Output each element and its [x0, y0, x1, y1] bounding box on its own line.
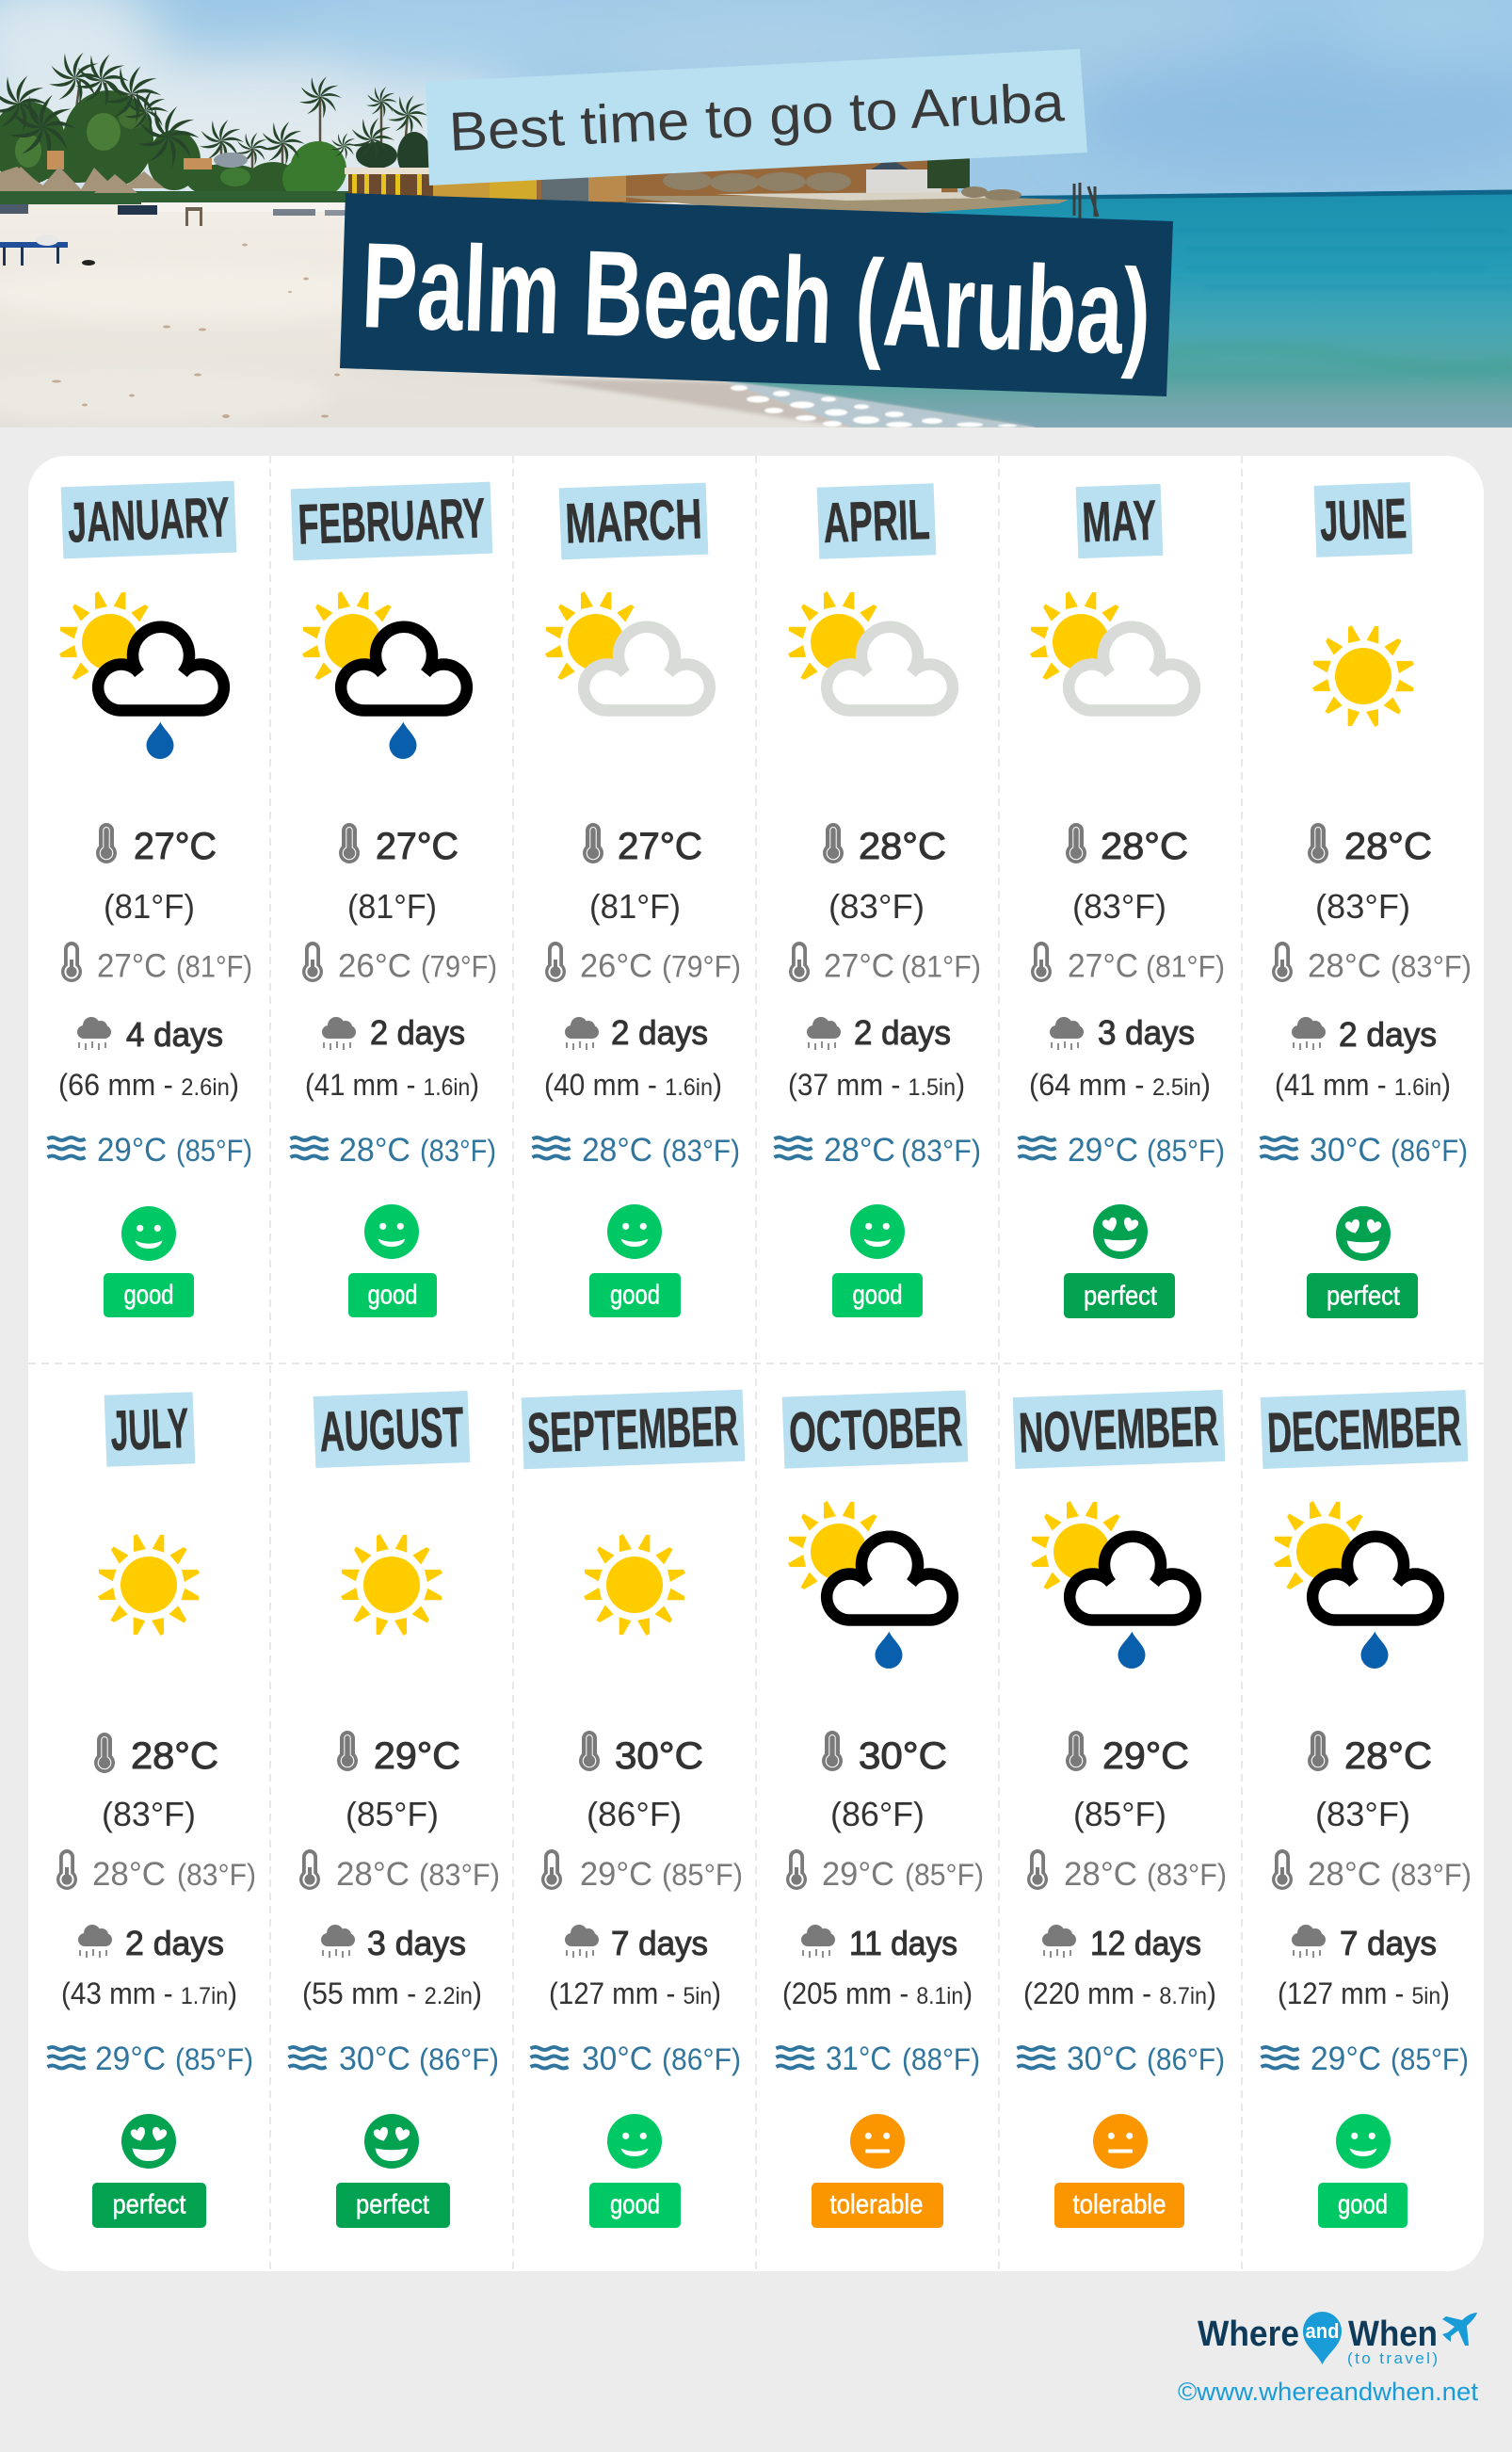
- average temperature: [1066, 1731, 1189, 1833]
- sea temperature: (86°F): [1147, 2042, 1225, 2076]
- low temperature: 27°C: [824, 947, 894, 985]
- low temperature: 29°C: [822, 1856, 894, 1893]
- low temperature: (85°F): [662, 1858, 743, 1892]
- low temperature: (85°F): [905, 1858, 984, 1892]
- rating: tolerable: [812, 2114, 943, 2228]
- sea temperature: (83°F): [901, 1134, 981, 1168]
- rating: good: [589, 1204, 681, 1317]
- low temperature: (83°F): [1391, 1858, 1472, 1892]
- sea temperature: 30°C: [582, 2041, 652, 2077]
- average temperature: [339, 823, 458, 926]
- low temperature: 28°C: [1308, 1856, 1381, 1893]
- rainfall: 3 days: [1098, 1013, 1195, 1052]
- icon: sun, dark cloud and rain drop: [302, 591, 467, 759]
- website credit: ©www.whereandwhen.net: [1178, 2378, 1479, 2406]
- month label: APRIL: [822, 488, 931, 555]
- month label: [291, 482, 492, 560]
- low temperature: [1272, 942, 1472, 985]
- sea temperature: 28°C: [339, 1132, 410, 1169]
- rainfall: [58, 1015, 239, 1102]
- average temperature: (83°F): [1072, 887, 1166, 926]
- average temperature: 28°C: [131, 1735, 218, 1777]
- month label: FEBRUARY: [297, 486, 487, 557]
- average temperature: [579, 1731, 703, 1833]
- sea temperature: 31°C: [826, 2041, 892, 2077]
- average temperature: (83°F): [1315, 887, 1410, 926]
- logo: Where and When (to travel): [1198, 2312, 1477, 2367]
- sea temperature: [1019, 1132, 1225, 1169]
- low temperature: [545, 942, 741, 985]
- average temperature: [823, 823, 946, 926]
- rainfall: (66 mm - 2.6in): [58, 1068, 239, 1102]
- rainfall: (41 mm - 1.6in): [1275, 1068, 1451, 1102]
- sea temperature: [288, 2041, 499, 2077]
- month label: JUNE: [1319, 487, 1407, 553]
- average temperature: (83°F): [828, 887, 925, 926]
- low temperature: (81°F): [176, 949, 252, 983]
- rating: good: [589, 2114, 681, 2228]
- low temperature: 26°C: [338, 947, 411, 985]
- sea temperature: (86°F): [419, 2042, 499, 2076]
- rainfall: 7 days: [1340, 1924, 1437, 1962]
- month label: [817, 483, 936, 559]
- icon: sun, dark cloud and rain drop: [1031, 1501, 1196, 1669]
- sea temperature: (86°F): [1391, 1134, 1468, 1168]
- low temperature: 28°C: [92, 1856, 166, 1893]
- rainfall: 2 days: [854, 1013, 951, 1052]
- average temperature: (83°F): [1315, 1795, 1410, 1833]
- rainfall: 7 days: [611, 1924, 708, 1962]
- panel: July: [47, 1392, 256, 2228]
- rainfall: [549, 1924, 721, 2010]
- low temperature: 28°C: [336, 1856, 410, 1893]
- month label: [1314, 482, 1412, 557]
- rating: good: good: [1338, 2190, 1388, 2220]
- rainfall: 4 days: [126, 1015, 223, 1054]
- low temperature: [789, 942, 981, 985]
- low temperature: [541, 1849, 743, 1893]
- average temperature: 28°C: [1344, 826, 1432, 867]
- sea temperature: 29°C: [95, 2041, 166, 2077]
- rainfall: 2 days: [611, 1013, 708, 1052]
- average temperature: 27°C: [618, 826, 702, 867]
- rating: perfect: perfect: [1327, 1281, 1400, 1311]
- icon: sun: [1312, 625, 1414, 727]
- rating: good: [1318, 2114, 1407, 2228]
- sea temperature: [290, 1132, 496, 1169]
- title banner: Palm Beach (Aruba): [340, 193, 1173, 396]
- icon: sun: [98, 1534, 200, 1636]
- rainfall: 2 days: [1339, 1015, 1437, 1054]
- month label: JANUARY: [67, 485, 231, 555]
- rainfall: [1278, 1924, 1450, 2010]
- icon: sun: [341, 1534, 442, 1636]
- logo: Where and When (to travel): (to travel): [1347, 2349, 1438, 2367]
- low temperature: [786, 1849, 984, 1893]
- rating: perfect: [1064, 1204, 1175, 1318]
- logo: Where and When (to travel): When: [1348, 2315, 1438, 2354]
- low temperature: (79°F): [662, 949, 741, 983]
- panel: October: [776, 1390, 984, 2228]
- average temperature: 29°C: [374, 1735, 460, 1777]
- average temperature: (83°F): [102, 1795, 196, 1833]
- sea temperature: [776, 2041, 980, 2077]
- rainfall: (37 mm - 1.5in): [788, 1068, 965, 1102]
- average temperature: [1308, 1731, 1432, 1833]
- sea temperature: 30°C: [1067, 2041, 1137, 2077]
- month label: [522, 1390, 745, 1469]
- rainfall: 11 days: [849, 1924, 957, 1962]
- rating: tolerable: tolerable: [1073, 2190, 1166, 2220]
- rating: good: [832, 1204, 923, 1317]
- low temperature: [56, 1849, 256, 1893]
- rating: good: good: [124, 1281, 173, 1311]
- month label: NOVEMBER: [1018, 1395, 1219, 1464]
- month label: [61, 481, 236, 558]
- sea temperature: [1262, 2041, 1469, 2077]
- rainfall: 2 days: [370, 1013, 465, 1052]
- sea temperature: [533, 1132, 740, 1169]
- average temperature: [1066, 823, 1188, 926]
- sea temperature: 28°C: [824, 1132, 895, 1169]
- rainfall: [61, 1924, 237, 2010]
- rating: perfect: [336, 2114, 450, 2228]
- icon: sun and grey cloud: [545, 591, 710, 711]
- month label: JULY: [109, 1396, 190, 1462]
- panel: March: [533, 483, 741, 1317]
- month label: [105, 1392, 195, 1467]
- icon: sun: [584, 1534, 685, 1636]
- low temperature: (81°F): [901, 949, 981, 983]
- rainfall: [1275, 1015, 1451, 1102]
- average temperature: (86°F): [587, 1795, 682, 1833]
- low temperature: 28°C: [1064, 1856, 1137, 1893]
- sea temperature: (83°F): [420, 1134, 496, 1168]
- subtitle banner: Best time to go to Aruba: Best time to go to Aruba: [447, 72, 1067, 163]
- rainfall: (41 mm - 1.6in): [305, 1068, 479, 1102]
- average temperature: [337, 1731, 460, 1833]
- low temperature: (83°F): [1147, 1858, 1227, 1892]
- low temperature: [299, 1849, 500, 1893]
- low temperature: (79°F): [421, 949, 497, 983]
- sea temperature: 30°C: [1310, 1132, 1381, 1169]
- rainfall: (55 mm - 2.2in): [302, 1976, 482, 2010]
- sea temperature: (86°F): [662, 2042, 741, 2076]
- average temperature: [583, 823, 702, 926]
- rating: perfect: perfect: [356, 2190, 429, 2220]
- average temperature: 28°C: [1344, 1735, 1432, 1777]
- rating: good: good: [853, 1281, 902, 1311]
- sea temperature: [531, 2041, 741, 2077]
- month label: [559, 483, 708, 559]
- rainfall: [544, 1013, 722, 1102]
- rainfall: (205 mm - 8.1in): [782, 1976, 973, 2010]
- average temperature: 30°C: [615, 1735, 703, 1777]
- average temperature: (85°F): [1073, 1795, 1166, 1833]
- rating: perfect: [92, 2114, 206, 2228]
- rainfall: [305, 1013, 479, 1102]
- month label: [1076, 484, 1163, 558]
- rainfall: [1029, 1013, 1211, 1102]
- low temperature: 26°C: [580, 947, 652, 985]
- rainfall: (127 mm - 5in): [549, 1976, 721, 2010]
- subtitle banner: Best time to go to Aruba: [426, 49, 1087, 186]
- average temperature: 28°C: [1101, 826, 1188, 867]
- rating: perfect: perfect: [1084, 1281, 1157, 1311]
- rainfall: (40 mm - 1.6in): [544, 1068, 722, 1102]
- icon: sun, dark cloud and rain drop: [1274, 1501, 1439, 1669]
- low temperature: [1031, 942, 1225, 985]
- sea temperature: 29°C: [97, 1132, 167, 1169]
- rating: good: [104, 1206, 194, 1317]
- sea temperature: [47, 1132, 252, 1169]
- month label: [314, 1391, 470, 1468]
- sea temperature: [1017, 2041, 1225, 2077]
- month label: MARCH: [564, 487, 703, 556]
- month label: [1013, 1390, 1225, 1469]
- average temperature: (86°F): [830, 1795, 925, 1833]
- rating: perfect: perfect: [113, 2190, 186, 2220]
- average temperature: (81°F): [104, 887, 195, 926]
- rainfall: [782, 1924, 973, 2010]
- rating: good: good: [610, 1281, 660, 1311]
- month label: [782, 1390, 968, 1469]
- month label: AUGUST: [318, 1395, 465, 1463]
- low temperature: (83°F): [419, 1858, 500, 1892]
- sea temperature: (85°F): [1147, 1134, 1225, 1168]
- panel: December: [1261, 1390, 1472, 2228]
- average temperature: 27°C: [134, 826, 217, 867]
- sea temperature: (85°F): [1391, 2042, 1469, 2076]
- sea temperature: (83°F): [662, 1134, 740, 1168]
- low temperature: [61, 942, 252, 985]
- sea temperature: 28°C: [582, 1132, 652, 1169]
- panel: January: [47, 481, 252, 1317]
- sea temperature: (85°F): [175, 2042, 253, 2076]
- icon: sun and grey cloud: [788, 591, 953, 711]
- panel: June: [1260, 482, 1472, 1318]
- rainfall: [302, 1924, 482, 2010]
- low temperature: 29°C: [580, 1856, 652, 1893]
- rainfall: 3 days: [367, 1924, 466, 1962]
- average temperature: [822, 1731, 947, 1833]
- average temperature: 28°C: [859, 826, 946, 867]
- low temperature: (81°F): [1146, 949, 1225, 983]
- sea temperature: [774, 1132, 981, 1169]
- month label: MAY: [1081, 489, 1158, 554]
- low temperature: (83°F): [1391, 949, 1472, 983]
- rainfall: (127 mm - 5in): [1278, 1976, 1450, 2010]
- title banner: Palm Beach (Aruba): Palm Beach (Aruba): [360, 218, 1153, 380]
- rainfall: (43 mm - 1.7in): [61, 1976, 237, 2010]
- month label: OCTOBER: [788, 1395, 963, 1464]
- low temperature: 28°C: [1308, 947, 1381, 985]
- rating: tolerable: [1054, 2114, 1184, 2228]
- panel: November: [1013, 1390, 1227, 2228]
- rating: good: [348, 1204, 437, 1317]
- sea temperature: 30°C: [339, 2041, 410, 2077]
- sea temperature: [47, 2041, 253, 2077]
- rainfall: 2 days: [125, 1924, 224, 1962]
- low temperature: [1027, 1849, 1227, 1893]
- sea temperature: 29°C: [1311, 2041, 1381, 2077]
- rating: perfect: [1307, 1206, 1418, 1318]
- panel: February: [290, 482, 497, 1317]
- month label: SEPTEMBER: [526, 1394, 739, 1465]
- low temperature: (83°F): [177, 1858, 256, 1892]
- average temperature: [94, 1733, 218, 1833]
- average temperature: 27°C: [376, 826, 458, 867]
- average temperature: [1308, 823, 1432, 926]
- average temperature: (85°F): [346, 1795, 439, 1833]
- rating: tolerable: tolerable: [830, 2190, 923, 2220]
- average temperature: [96, 823, 217, 926]
- low temperature: [1272, 1849, 1472, 1893]
- average temperature: (81°F): [347, 887, 437, 926]
- low temperature: 27°C: [1068, 947, 1138, 985]
- sea temperature: (88°F): [902, 2042, 980, 2076]
- panel: April: [774, 483, 981, 1317]
- panel: September: [522, 1390, 745, 2228]
- sea temperature: 29°C: [1068, 1132, 1138, 1169]
- low temperature: 27°C: [97, 947, 167, 985]
- panel: August: [288, 1391, 500, 2228]
- low temperature: [302, 942, 497, 985]
- icon: sun and grey cloud: [1030, 591, 1195, 711]
- panel: May: [1019, 484, 1225, 1318]
- rainfall: (220 mm - 8.7in): [1023, 1976, 1216, 2010]
- logo: Where and When (to travel): and: [1305, 2319, 1339, 2343]
- rating: good: good: [610, 2190, 660, 2220]
- rainfall: [1023, 1924, 1216, 2010]
- average temperature: (81°F): [589, 887, 681, 926]
- rating: good: good: [367, 1281, 418, 1311]
- hero photo: beach in Palm Beach, Aruba: [0, 0, 1512, 427]
- rainfall: (64 mm - 2.5in): [1029, 1068, 1211, 1102]
- logo: Where and When (to travel): Where: [1198, 2315, 1299, 2354]
- sea temperature: (85°F): [176, 1134, 252, 1168]
- average temperature: 29°C: [1102, 1735, 1189, 1777]
- rainfall: [788, 1013, 965, 1102]
- icon: sun, dark cloud and rain drop: [59, 591, 224, 759]
- sea temperature: [1260, 1132, 1468, 1169]
- panel: white calendar card: [28, 456, 1484, 2271]
- average temperature: 30°C: [859, 1735, 947, 1777]
- rainfall: 12 days: [1090, 1924, 1201, 1962]
- icon: sun, dark cloud and rain drop: [788, 1501, 953, 1669]
